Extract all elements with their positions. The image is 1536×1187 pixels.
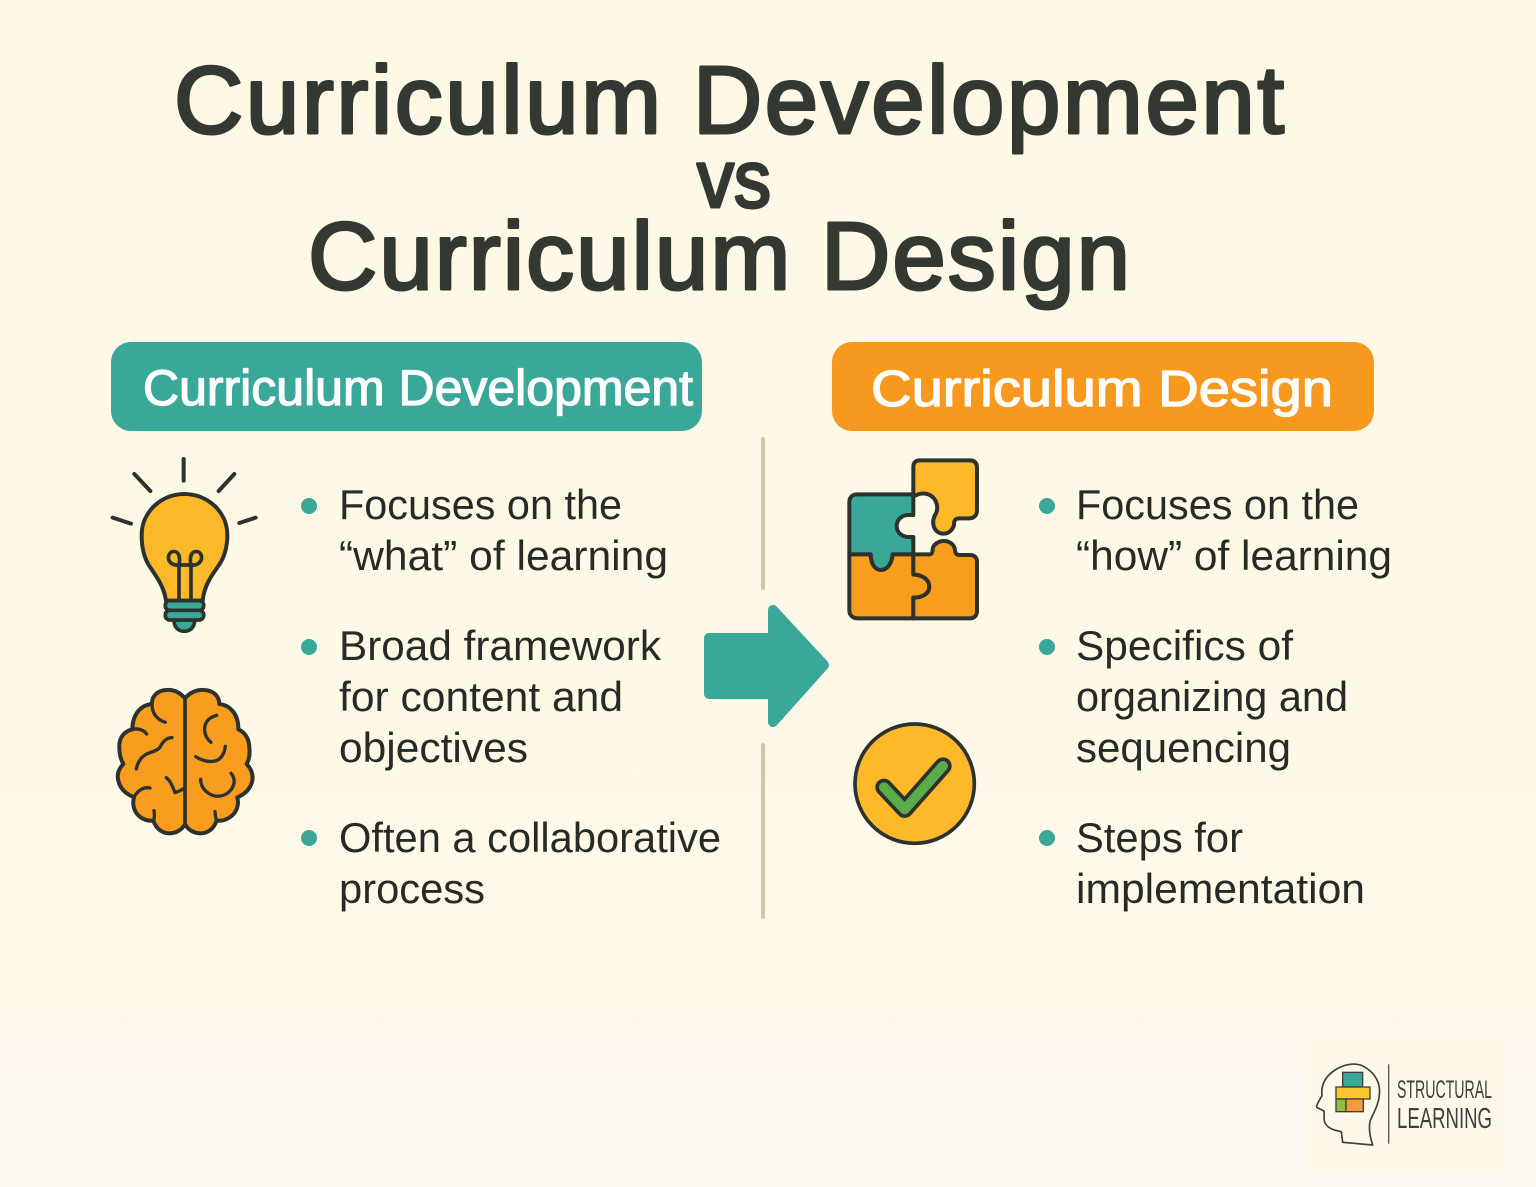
bullet: specifics: organizing and: [1076, 673, 1348, 720]
bullet: broad framework: Broad framework: [339, 622, 662, 669]
bullet: focuses on how: [1039, 481, 1392, 579]
bullet: specifics: sequencing: [1076, 724, 1291, 771]
divider: lower: [761, 743, 765, 919]
bullet: focuses on how: “how” of learning: [1076, 532, 1392, 579]
bullet list: curriculum design: [1039, 481, 1392, 912]
logo: structural learning: [1307, 1040, 1506, 1171]
bullet: steps: implementation: [1076, 865, 1365, 912]
bullet: specifics: Specifics of: [1076, 622, 1293, 669]
title: Curriculum Development: [174, 47, 1284, 154]
icon: light bulb: [113, 459, 256, 631]
arrow: [709, 610, 824, 722]
bullet list: curriculum development: [301, 481, 721, 912]
bullet: broad framework: [301, 622, 662, 771]
bullet: focuses on what: [301, 481, 668, 579]
title: vs: [697, 134, 771, 225]
bullet: collaborative process: process: [339, 865, 485, 912]
panel: curriculum development header: Curriculum Development: [143, 360, 693, 416]
panel: curriculum design header: Curriculum Design: [871, 360, 1333, 417]
divider: upper: [761, 437, 765, 590]
icon: puzzle: [849, 460, 977, 618]
icon: check circle: [855, 724, 974, 843]
icon: head with blocks: [1317, 1064, 1389, 1145]
bullet: broad framework: for content and: [339, 673, 623, 720]
panel: curriculum development header: [111, 342, 702, 431]
bullet: collaborative process: Often a collaborative: [339, 814, 721, 861]
bullet: focuses on what: “what” of learning: [339, 532, 668, 579]
bullet: collaborative process: [301, 814, 721, 912]
bullet: steps: Steps for: [1076, 814, 1243, 861]
icon: brain: [118, 690, 253, 833]
bullet: focuses on how: Focuses on the: [1076, 481, 1359, 528]
bullet: broad framework: objectives: [339, 724, 528, 771]
bullet: specifics: [1039, 622, 1348, 771]
bullet: focuses on what: Focuses on the: [339, 481, 622, 528]
bullet: steps: [1039, 814, 1365, 912]
title: [174, 47, 1284, 310]
panel: curriculum design header: [832, 342, 1374, 431]
title: Curriculum Design: [308, 203, 1130, 310]
